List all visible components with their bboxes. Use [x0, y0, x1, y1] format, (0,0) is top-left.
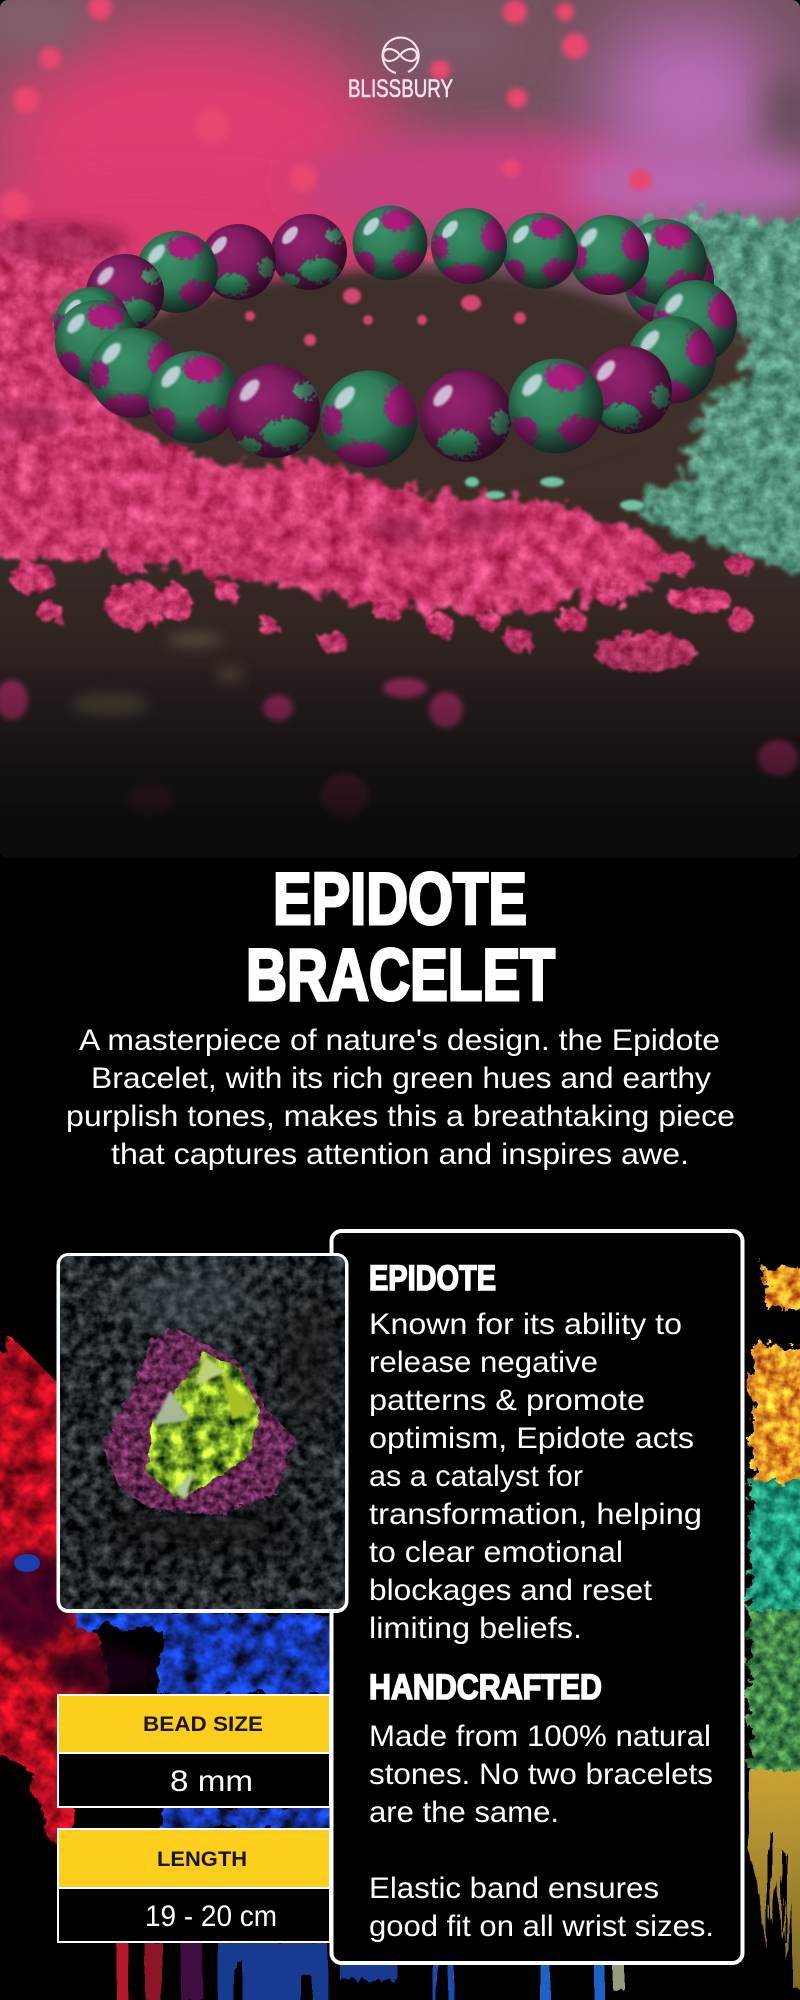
paint drips: bottom	[117, 1940, 626, 2000]
title: EPIDOTE	[273, 859, 527, 940]
title: BRACELET	[246, 935, 555, 1016]
card frame	[332, 1231, 742, 1963]
green powder flecks	[465, 477, 644, 510]
powder mound shadows	[0, 220, 510, 546]
handcrafted description: Elastic band ensures	[369, 1872, 659, 1905]
intro paragraph: purplish tones, makes this a breathtaking piece	[66, 1100, 735, 1133]
hero photo: bracelet on coloured powder	[0, 0, 800, 920]
crystal highlights	[153, 1356, 255, 1500]
table fade to black	[0, 620, 800, 858]
intro paragraph: Bracelet, with its rich green hues and earthy	[91, 1062, 711, 1095]
bead size value: 8 mm	[170, 1765, 253, 1798]
paint drips: right	[748, 1770, 800, 1990]
photo frame	[58, 1255, 346, 1611]
pink powder mounds	[0, 222, 668, 611]
length header	[58, 1829, 330, 1888]
epidote stone photo	[58, 1255, 346, 1611]
length value: 19 - 20 cm	[145, 1900, 277, 1933]
epidote description: release negative	[369, 1346, 598, 1379]
scattered pink powder clumps	[10, 541, 754, 672]
pink and purple powder clouds	[0, 0, 800, 300]
bead size header: BEAD SIZE	[143, 1713, 263, 1736]
brand name: BLISSBURY	[348, 75, 453, 103]
bead size value	[58, 1753, 330, 1807]
intro paragraph: that captures attention and inspires awe.	[111, 1138, 689, 1171]
length header: LENGTH	[157, 1848, 247, 1871]
bead size header	[58, 1695, 330, 1753]
epidote description	[369, 1308, 702, 1645]
handcrafted description	[369, 1720, 714, 1943]
heading: handcrafted: HANDCRAFTED	[369, 1668, 602, 1707]
intro paragraph	[66, 1024, 735, 1171]
epidote description: Known for its ability to	[369, 1308, 682, 1341]
heading: epidote: EPIDOTE	[369, 1259, 496, 1298]
handcrafted description: stones. No two bracelets	[369, 1758, 713, 1791]
dark rock ground	[60, 1256, 345, 1609]
hero backdrop	[0, 0, 800, 920]
icon: infinity in circle	[383, 38, 419, 73]
paint splash: blue behind table	[72, 1606, 350, 1831]
epidote description: limiting beliefs.	[369, 1612, 582, 1645]
epidote description: as a catalyst for	[369, 1460, 583, 1493]
epidote description: to clear emotional	[369, 1536, 623, 1569]
spec table	[58, 1695, 330, 1942]
epidote description: patterns & promote	[369, 1384, 645, 1417]
info card	[332, 1231, 742, 1963]
blurred table highlights	[72, 632, 244, 717]
paint splash: right orange	[752, 1268, 800, 1495]
paint speck: blue dot	[14, 1554, 40, 1572]
epidote description: blockages and reset	[369, 1574, 653, 1607]
green crystal	[145, 1353, 260, 1500]
intro paragraph: A masterpiece of nature's design. the Epidote	[79, 1024, 720, 1057]
rock specimen	[101, 1328, 295, 1515]
handcrafted description: are the same.	[369, 1796, 559, 1829]
epidote description: optimism, Epidote acts	[369, 1422, 694, 1455]
brand logo	[348, 38, 453, 103]
handcrafted description: good fit on all wrist sizes.	[369, 1910, 714, 1943]
floating pink powder particles	[0, 0, 651, 220]
paint splash: dark maroon	[0, 1550, 155, 1694]
paint splash: left red	[0, 1345, 110, 1850]
small particles on the table	[245, 247, 526, 346]
title	[246, 859, 555, 1016]
handcrafted description: Made from 100% natural	[369, 1720, 711, 1753]
wooden table inside bracelet	[142, 261, 650, 370]
blurred foreground particles	[0, 678, 798, 818]
bracelet beads	[54, 206, 739, 469]
paint splash: right teal and green	[750, 1480, 800, 1620]
epidote description: transformation, helping	[369, 1498, 702, 1531]
green powder mound	[610, 215, 800, 580]
rock shading	[90, 1274, 340, 1546]
length value	[58, 1888, 330, 1942]
